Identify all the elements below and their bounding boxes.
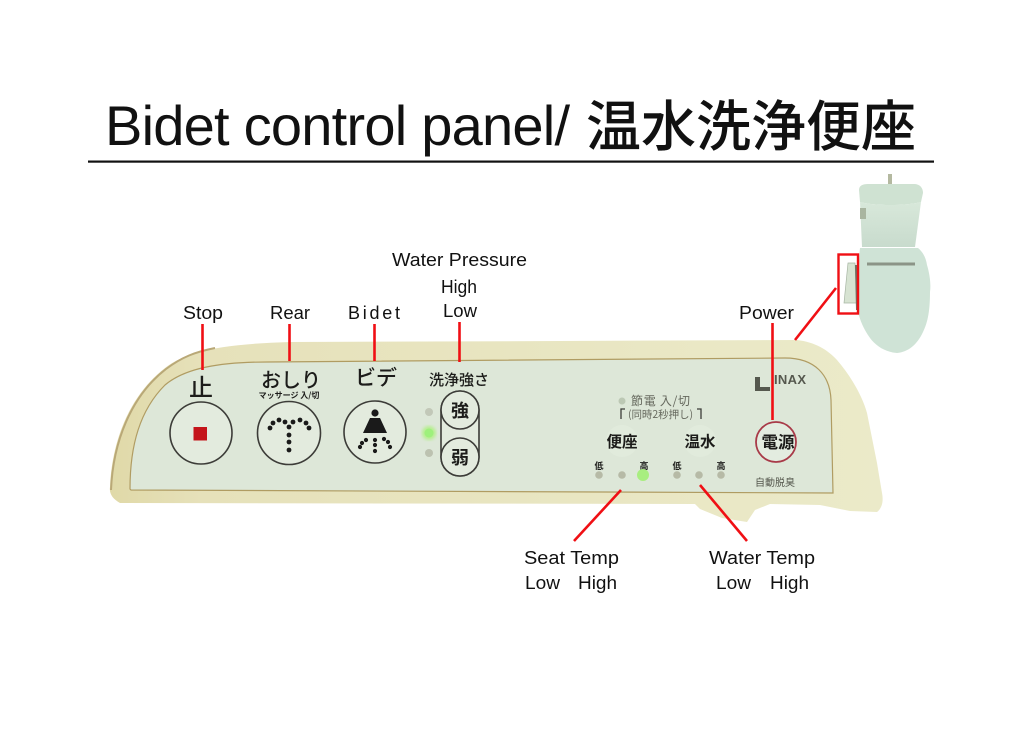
- water temperature button: [672, 425, 726, 479]
- callout box around side panel: [838, 254, 858, 314]
- label: rear: Rear: [270, 303, 310, 323]
- label: seat temp: [524, 548, 619, 593]
- label: water pressure: High: [441, 277, 477, 297]
- label: water temp: High: [770, 573, 809, 593]
- bidet button: ビデ: [355, 362, 397, 392]
- label: water temp: Water Temp: [709, 548, 815, 568]
- title: Bidet control panel/: [105, 94, 570, 157]
- label: water pressure: Low: [443, 301, 478, 321]
- arrow: bidet: [373, 324, 376, 361]
- casing edge shading: [111, 348, 215, 490]
- seat temperature button: 低: [594, 459, 604, 472]
- label: bidet: Bidet: [348, 303, 400, 323]
- label: stop: Stop: [183, 303, 223, 323]
- title: [105, 82, 916, 162]
- power button: 電源: [762, 429, 795, 453]
- panel: control panel body: [110, 340, 883, 522]
- label: water temp: Low: [716, 573, 752, 593]
- panel casing: [110, 340, 883, 522]
- seat hinge: [867, 262, 915, 266]
- title: 温水洗浄便座: [586, 82, 916, 162]
- arrow: panel to side panel: [795, 288, 836, 340]
- label: water temp: [709, 548, 815, 593]
- label: power: Power: [739, 303, 794, 323]
- title underline: [88, 160, 934, 163]
- water pressure buttons: [422, 369, 489, 476]
- rear button: マッサージ 入/切: [259, 390, 319, 401]
- label: seat temp: Low: [525, 573, 561, 593]
- power button: [755, 422, 796, 489]
- toilet seat: [858, 248, 930, 353]
- label: water pressure: Water Pressure: [392, 250, 527, 270]
- water pressure buttons: 洗浄強さ: [429, 369, 489, 390]
- arrow: power: [771, 323, 774, 420]
- arrow: water pressure: [458, 322, 461, 362]
- side control panel: [844, 263, 857, 303]
- seat temperature button: 高: [639, 459, 649, 472]
- rear button: [258, 364, 321, 464]
- seat temperature button: 便座: [606, 430, 638, 452]
- seat temperature button: [594, 425, 649, 481]
- panel face: [130, 358, 833, 493]
- power saving label: [618, 392, 701, 422]
- INAX logo: INAX: [774, 372, 806, 387]
- water temperature button: 高: [716, 459, 726, 472]
- arrow: rear: [288, 324, 291, 361]
- water temperature button: 温水: [684, 430, 716, 452]
- toilet tank: [859, 174, 923, 247]
- arrow: water temp: [700, 485, 747, 541]
- water pressure buttons: 強: [451, 397, 469, 423]
- water temperature button: 低: [672, 459, 682, 472]
- power saving label: 節電 入/切: [631, 392, 690, 409]
- water pressure buttons: 弱: [451, 444, 469, 470]
- label: water pressure: [392, 250, 527, 321]
- stop button: 止: [189, 368, 213, 403]
- INAX logo: [755, 372, 806, 391]
- stop button: [170, 368, 232, 464]
- arrow: seat temp: [574, 490, 621, 541]
- label: seat temp: High: [578, 573, 617, 593]
- rear button: おしり: [261, 364, 321, 393]
- label: seat temp: Seat Temp: [524, 548, 619, 568]
- arrow: stop: [201, 324, 204, 370]
- power saving label: (同時2秒押し): [628, 407, 693, 422]
- bidet button: [344, 362, 406, 463]
- toilet illustration: [844, 174, 930, 353]
- power button: 自動脱臭: [755, 474, 795, 489]
